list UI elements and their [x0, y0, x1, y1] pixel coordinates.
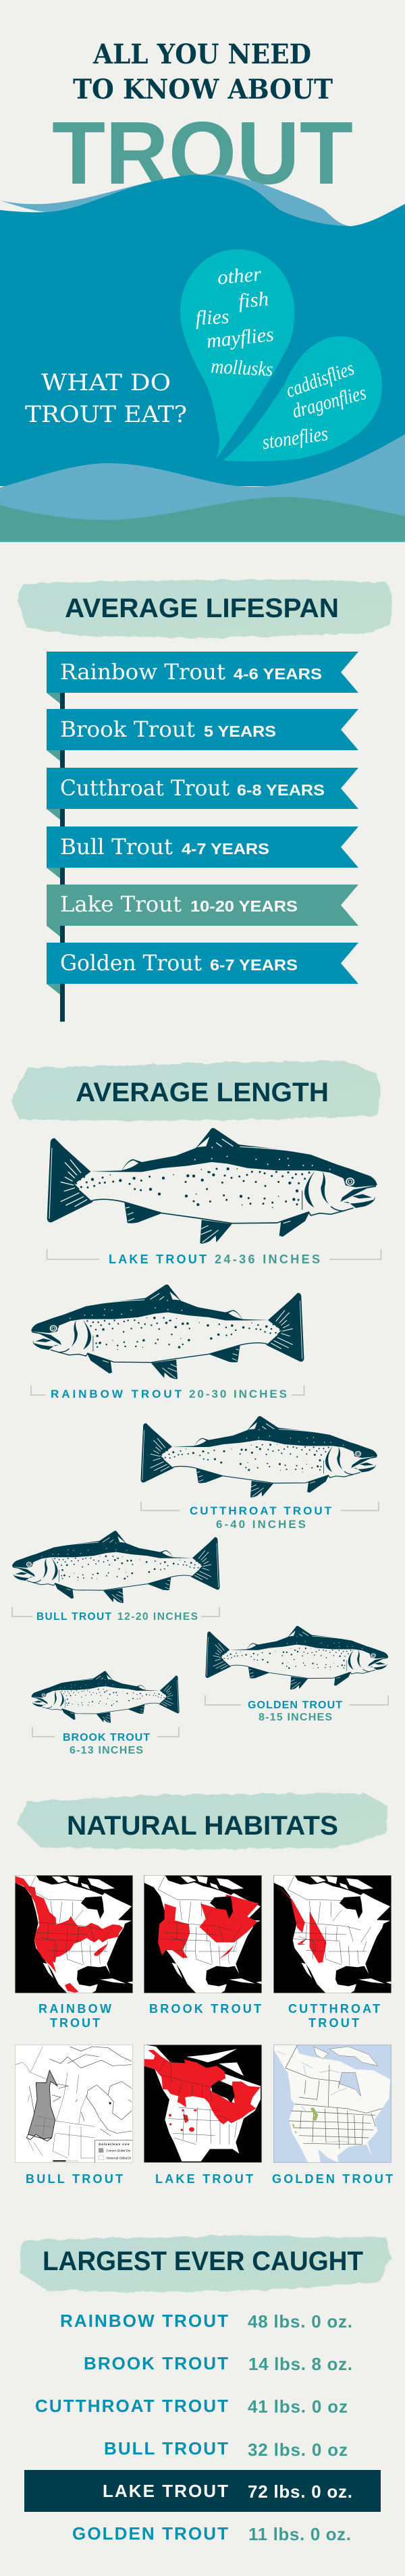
speech bubble one: other	[217, 263, 263, 289]
ribbon: golden	[47, 943, 358, 995]
panel: largest ever caught	[19, 2236, 392, 2544]
wave bottom green	[0, 497, 405, 541]
caption: golden trout	[205, 1696, 388, 1723]
fish: lake trout	[47, 1128, 377, 1244]
caption: golden trout: GOLDEN TROUT	[248, 1700, 342, 1711]
ribbon: rainbow: 4-6 YEARS	[234, 665, 322, 683]
title line one: ALL YOU NEED	[92, 38, 311, 70]
heading: NATURAL HABITATS	[67, 1811, 338, 1841]
panel: natural habitats	[15, 1793, 393, 2186]
fish: bull trout	[12, 1531, 220, 1603]
row: lake	[103, 2481, 352, 2502]
caption: golden trout: 8-15 INCHES	[259, 1712, 332, 1723]
wave bottom light	[0, 434, 405, 542]
row: cutthroat	[35, 2396, 348, 2417]
ribbon: cutthroat: Cutthroat Trout	[60, 775, 230, 801]
ribbon: cutthroat: 6-8 YEARS	[237, 781, 325, 799]
ribbon: brook	[47, 709, 358, 761]
row: lake: LAKE TROUT	[103, 2481, 228, 2501]
fish: cutthroat trout	[140, 1416, 377, 1498]
map: cutthroat trout	[273, 1875, 392, 1993]
label: cutthroat trout: TROUT	[308, 2016, 359, 2030]
question heading	[25, 369, 187, 428]
bull map legend: Salvelinus con	[99, 2143, 130, 2146]
row: cutthroat: 41 lbs. 0 oz	[248, 2396, 348, 2417]
label: golden trout: GOLDEN TROUT	[272, 2172, 393, 2186]
caption: cutthroat trout	[141, 1502, 379, 1531]
heading brush	[18, 579, 393, 638]
speech bubble two: caddisflies	[283, 357, 357, 402]
row: bull: BULL TROUT	[104, 2438, 228, 2459]
ribbon: bull	[47, 826, 358, 878]
caption: bull trout	[12, 1607, 219, 1623]
ribbon: bull: 4-7 YEARS	[182, 840, 269, 858]
label: cutthroat trout	[288, 2002, 380, 2030]
flag pole	[60, 693, 65, 1022]
speech bubble one: mollusks	[211, 355, 273, 381]
panel: average lifespan	[18, 579, 393, 1022]
heading: AVERAGE LENGTH	[76, 1078, 329, 1107]
speech bubble one	[180, 249, 294, 459]
ribbon: lake: 10-20 YEARS	[190, 897, 298, 915]
map: brook trout	[144, 1875, 262, 1993]
ribbon: golden: Golden Trout	[60, 950, 202, 976]
row: rainbow: RAINBOW TROUT	[60, 2311, 228, 2331]
ribbon: lake: Lake Trout	[60, 891, 182, 917]
row: cutthroat: CUTTHROAT TROUT	[35, 2396, 228, 2416]
speech bubble one: mayflies	[205, 323, 275, 352]
label: cutthroat trout: CUTTHROAT	[288, 2002, 380, 2016]
row: brook	[84, 2353, 352, 2374]
title line two: TO KNOW ABOUT	[73, 74, 333, 105]
row: bull: 32 lbs. 0 oz	[248, 2440, 348, 2460]
speech bubble one: flies	[195, 305, 230, 330]
speech bubble two	[223, 336, 382, 461]
caption: bull trout: 12-20 INCHES	[117, 1611, 198, 1623]
ribbon: brook: 5 YEARS	[204, 722, 276, 740]
fish: golden trout	[205, 1626, 388, 1689]
row: rainbow: 48 lbs. 0 oz.	[248, 2311, 352, 2332]
caption: cutthroat trout: 6-40 INCHES	[216, 1518, 306, 1531]
speech bubble two: stoneflies	[261, 423, 329, 454]
caption: cutthroat trout: CUTTHROAT TROUT	[190, 1504, 332, 1517]
row: rainbow	[60, 2311, 352, 2332]
row: golden	[72, 2523, 351, 2544]
wave main water	[0, 175, 405, 486]
highlight bar	[24, 2470, 381, 2512]
bull map legend: Historical Global Di	[106, 2156, 131, 2159]
caption: lake trout	[47, 1249, 381, 1266]
label: lake trout: LAKE TROUT	[155, 2172, 253, 2186]
title big word: TROUT	[52, 103, 353, 203]
heading: AVERAGE LIFESPAN	[65, 594, 339, 623]
map: rainbow trout	[15, 1875, 133, 1993]
caption: rainbow trout: 20-30 INCHES	[189, 1388, 287, 1400]
header: title and food section	[0, 38, 405, 542]
row: golden: GOLDEN TROUT	[72, 2523, 228, 2544]
bull map legend	[95, 2140, 134, 2163]
caption: bull trout: BULL TROUT	[36, 1611, 112, 1623]
label: rainbow trout: TROUT	[50, 2016, 100, 2030]
ribbon: bull: Bull Trout	[60, 834, 173, 860]
caption: brook trout: BROOK TROUT	[63, 1732, 150, 1743]
ribbon: rainbow	[47, 652, 358, 704]
caption: brook trout	[32, 1727, 179, 1756]
question heading: WHAT DO	[41, 369, 171, 396]
ribbon: brook: Brook Trout	[60, 716, 195, 742]
ribbon: lake	[47, 885, 358, 937]
bull map legend: Current Global Dis	[106, 2149, 130, 2153]
caption: lake trout: 24-36 INCHES	[215, 1253, 320, 1266]
map: bull trout	[15, 2045, 133, 2163]
speech bubble one: fish	[238, 288, 269, 313]
question heading: TROUT EAT?	[25, 401, 187, 428]
heading: LARGEST EVER CAUGHT	[43, 2246, 363, 2276]
label: rainbow trout: RAINBOW	[38, 2002, 111, 2016]
row: brook: BROOK TROUT	[84, 2353, 228, 2373]
heading brush	[19, 2236, 392, 2292]
ribbon: rainbow: Rainbow Trout	[60, 659, 225, 685]
ribbon: golden: 6-7 YEARS	[210, 956, 298, 974]
caption: brook trout: 6-13 INCHES	[70, 1745, 143, 1756]
row: brook: 14 lbs. 8 oz.	[248, 2354, 352, 2374]
row: lake: 72 lbs. 0 oz.	[248, 2481, 352, 2502]
caption: rainbow trout	[31, 1386, 304, 1400]
label: brook trout: BROOK TROUT	[149, 2002, 261, 2016]
row: golden: 11 lbs. 0 oz.	[248, 2524, 351, 2544]
map: lake trout	[144, 2045, 262, 2163]
heading brush	[11, 1060, 381, 1121]
row: bull	[104, 2438, 348, 2460]
map: golden trout	[273, 2045, 392, 2163]
label: rainbow trout	[38, 2002, 111, 2030]
wave back top	[0, 174, 351, 230]
heading brush	[16, 1793, 387, 1849]
fish: rainbow trout	[31, 1284, 304, 1379]
ribbon: cutthroat	[47, 768, 358, 820]
caption: lake trout: LAKE TROUT	[109, 1253, 207, 1266]
speech bubble two: dragonflies	[290, 382, 369, 423]
caption: rainbow trout: RAINBOW TROUT	[51, 1388, 182, 1400]
fish: brook trout	[32, 1671, 180, 1723]
label: bull trout: BULL TROUT	[26, 2172, 123, 2186]
panel: average length	[11, 1060, 388, 1756]
